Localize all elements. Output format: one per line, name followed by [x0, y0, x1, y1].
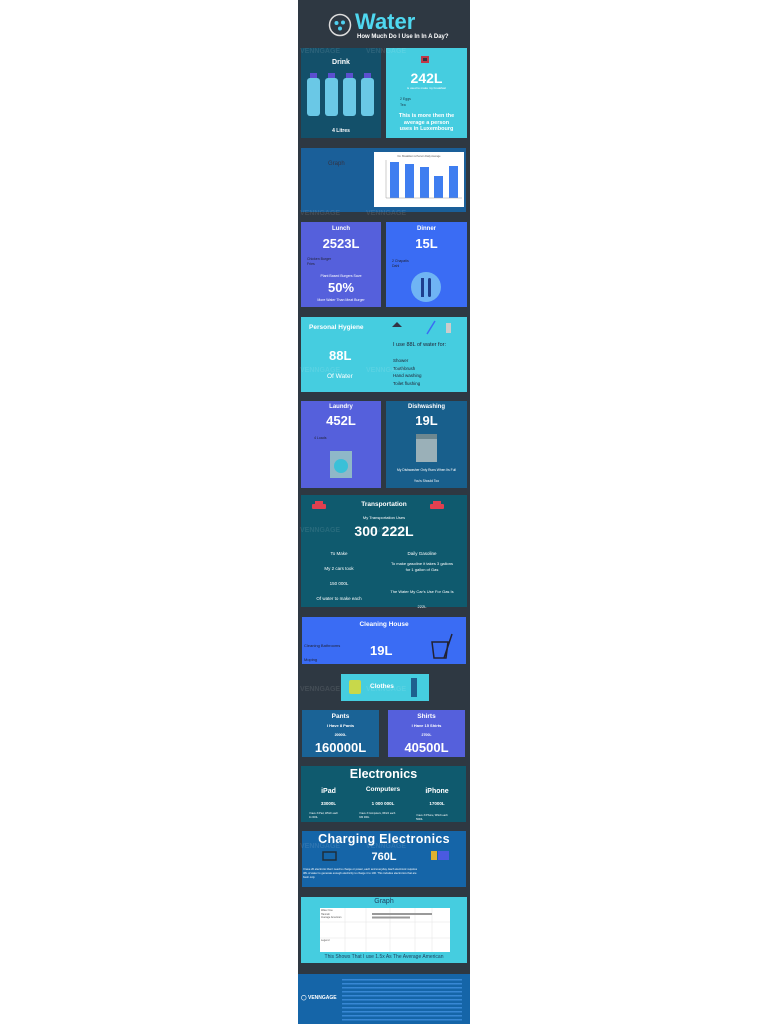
heading: drink: Drink — [332, 59, 350, 66]
panel: electronics: Electronics — [350, 767, 417, 781]
panel: personal hygiene: Personal Hygiene — [309, 324, 364, 331]
panel: dishwashing — [386, 401, 467, 488]
callout: luxembourg — [398, 113, 454, 132]
table chart: Legend — [321, 939, 330, 942]
panel: transportation: My Transportation Uses — [363, 515, 405, 520]
panel: personal hygiene: Hand washing — [393, 373, 422, 378]
panel: charging electronics: fresh only. — [303, 876, 315, 879]
stat: 19L: 19L — [415, 413, 438, 428]
callout: luxembourg: average a person — [404, 120, 449, 126]
infographic strip: VENNGAGE — [300, 210, 340, 217]
panel: laundry — [301, 401, 381, 488]
icon: car left — [312, 501, 326, 509]
infographic strip: VENNGAGE — [366, 527, 406, 534]
subtitle: How Much Do I Use In In A Day? — [357, 34, 449, 40]
text: breakfast note: is used to make my breakfast — [407, 86, 446, 90]
icon: washing machine — [330, 451, 352, 478]
infographic strip: VENNGAGE — [300, 527, 340, 534]
infographic strip — [298, 0, 470, 1024]
text: sources — [342, 979, 462, 1021]
panel: clothes: Clothes — [370, 683, 394, 690]
bar chart: No. Breakfast vs Person Daily Average — [397, 155, 441, 158]
stat: 88L: 88L — [329, 348, 351, 363]
panel: lunch: Lunch — [332, 226, 350, 232]
panel: shirts: Shirts — [417, 713, 436, 720]
title: Water — [355, 9, 415, 34]
infographic strip: VENNGAGE — [366, 48, 406, 55]
column: ipad — [309, 788, 338, 819]
infographic strip: VENNGAGE — [366, 843, 406, 850]
stat: 19L: 19L — [370, 643, 392, 658]
panel: graph 1 — [301, 148, 466, 212]
stat: 160000L: 160000L — [315, 740, 366, 755]
panel: dishwashing: Dishwashing — [408, 404, 445, 410]
title icon: water drops — [328, 14, 352, 36]
text: 4 litres: 4 Litres — [332, 128, 350, 134]
text: to make: To Make — [330, 551, 348, 556]
infographic strip: VENNGAGE — [300, 686, 340, 693]
text: to make: Of water to make each — [316, 596, 362, 601]
panel: electronics — [301, 766, 466, 822]
panel: personal hygiene: Shower — [393, 358, 408, 363]
panel: charging electronics: I have 20 electronic that I need to charge or power, each and everyday. Each electronic requires — [303, 868, 417, 871]
panel: lunch — [301, 222, 381, 307]
panel: clothes — [341, 674, 429, 701]
panel: pants — [302, 710, 379, 757]
panel: graph 2: Graph — [374, 898, 394, 905]
icon: bucket and mop — [431, 634, 453, 659]
infographic strip: VENNGAGE — [300, 843, 340, 850]
column: computers: I have 3 Computers, Which each — [359, 812, 395, 815]
panel: transportation — [301, 495, 467, 607]
panel: personal hygiene: Toothbrush — [393, 366, 415, 370]
panel: shirts: I Have 15 Shirts — [412, 723, 441, 728]
panel: cleaning house: Cleaning House — [359, 621, 409, 628]
column: computers: 1 000 000L — [372, 801, 394, 806]
panel: charging electronics: 38L of water to generate enough electricity to charge it to 100. This includes electronics that are — [303, 872, 417, 875]
icon: fork and knife — [411, 272, 441, 302]
panel: dinner: Dahl — [392, 264, 399, 268]
panel: cleaning house: Cleaning Bathrooms — [304, 643, 340, 648]
icon: dishwasher — [416, 434, 437, 462]
panel: pants: Pants — [332, 713, 349, 720]
panel: shirts: 2700L — [422, 733, 431, 737]
column: ipad: iPad — [321, 788, 336, 795]
panel: dinner: 2 Chapatis — [392, 259, 409, 263]
callout: luxembourg: This is more then the — [399, 113, 454, 119]
column: computers: Computers — [366, 786, 400, 793]
panel: breakfast — [386, 48, 467, 138]
panel: charging electronics — [302, 831, 466, 887]
list: uses: I use 88L of water for: — [393, 342, 446, 348]
panel: personal hygiene: Toilet flushing — [393, 380, 420, 386]
panel: graph 2: This Shows That I use 1.5x As The Average American — [325, 954, 443, 960]
panel: laundry: 4 Loads — [314, 436, 326, 440]
callout: luxembourg: uses in Luxembourg — [400, 126, 453, 132]
icon: car right — [430, 501, 444, 509]
panel: charging electronics: Charging Electronics — [318, 832, 450, 846]
panel: lunch: Plant Based Burgers Save — [320, 274, 362, 278]
column: iphone: 17000L — [429, 801, 445, 806]
panel: transportation: for 1 gallon of Gas — [406, 567, 438, 572]
panel: personal hygiene — [301, 317, 467, 392]
panel: dinner: Dinner — [417, 226, 436, 232]
panel: transportation: Transportation — [361, 501, 407, 508]
panel: graph 2 — [301, 897, 467, 963]
table chart: Water Use — [321, 909, 333, 912]
text: to make: My 2 cars took — [324, 566, 354, 571]
panel: dinner — [386, 222, 467, 307]
panel: dishwashing: You's Should Too — [414, 479, 439, 483]
table chart: Hannah — [321, 913, 330, 916]
panel: transportation: 222L — [418, 604, 426, 609]
stat: 760L: 760L — [371, 851, 397, 863]
column: iphone: I have 3 iPhone, Which each — [416, 814, 448, 817]
infographic strip: VENNGAGE — [366, 367, 406, 374]
icon: pants — [411, 678, 417, 697]
heading: graph: Graph — [328, 161, 345, 167]
stat: 2523L: 2523L — [323, 236, 359, 251]
column: iphone: iPhone — [425, 788, 449, 795]
text: to make: 150 000L — [330, 581, 348, 586]
panel: lunch: Chicken Burger — [307, 257, 331, 261]
bar chart — [374, 152, 464, 207]
panel: laundry: Laundry — [329, 404, 353, 410]
text: daily gasoline: Daily Gasoline — [407, 551, 436, 556]
panel: breakfast: 2 Eggs — [400, 97, 411, 101]
stat: 50%: 50% — [328, 280, 354, 295]
table chart — [320, 908, 450, 952]
panel: cleaning house: Moping — [304, 657, 317, 662]
table chart: Average American — [321, 916, 342, 919]
panel: personal hygiene: Of Water — [327, 373, 353, 380]
icons: shower, toothbrush, toilet — [392, 320, 451, 334]
icon: bottles — [307, 73, 374, 116]
column: iphone — [416, 788, 449, 821]
panel: transportation: To make gasoline it takes 3 gallons — [391, 561, 453, 566]
logo: venngage: ◯ VENNGAGE — [301, 995, 337, 1001]
icon: mug — [421, 56, 429, 63]
infographic strip: VENNGAGE — [300, 48, 340, 55]
column: ipad: I have 3 iPad, Which each — [309, 812, 338, 815]
panel: dishwashing: My Dishwasher Only Runs When Its Full — [397, 468, 456, 472]
footer — [298, 974, 470, 1024]
panel: cleaning house — [302, 617, 466, 664]
panel: lunch: Fries — [307, 262, 315, 266]
stat: 242L: 242L — [411, 70, 442, 86]
stat: 452L: 452L — [326, 413, 356, 428]
icon: battery — [322, 851, 337, 861]
panel: transportation: The Water My Car's Use For Gas Is — [390, 589, 454, 594]
infographic strip: VENNGAGE — [300, 367, 340, 374]
column: iphone: 5600L — [416, 818, 423, 821]
infographic strip: VENNGAGE — [366, 686, 406, 693]
panel: pants: 20000L — [335, 733, 346, 737]
panel: pants: I Have 8 Pants — [327, 723, 354, 728]
icon: charger — [431, 851, 449, 860]
column: ipad: 33000L — [321, 801, 336, 806]
column: computers — [359, 786, 400, 819]
panel: breakfast: Tea — [400, 103, 406, 107]
text: to make — [316, 551, 362, 601]
panel: drink — [301, 48, 381, 138]
column: ipad: 11 000L — [309, 816, 318, 819]
stat: 15L: 15L — [415, 236, 438, 251]
infographic strip: VENNGAGE — [366, 210, 406, 217]
column: computers: 330 000L — [359, 816, 369, 819]
stat: 40500L: 40500L — [404, 740, 449, 755]
panel: lunch: More Water Than Meat Burger — [317, 298, 365, 302]
stat: 300 222L: 300 222L — [354, 523, 414, 539]
panel: shirts — [388, 710, 465, 757]
icon: sweater — [349, 680, 361, 694]
